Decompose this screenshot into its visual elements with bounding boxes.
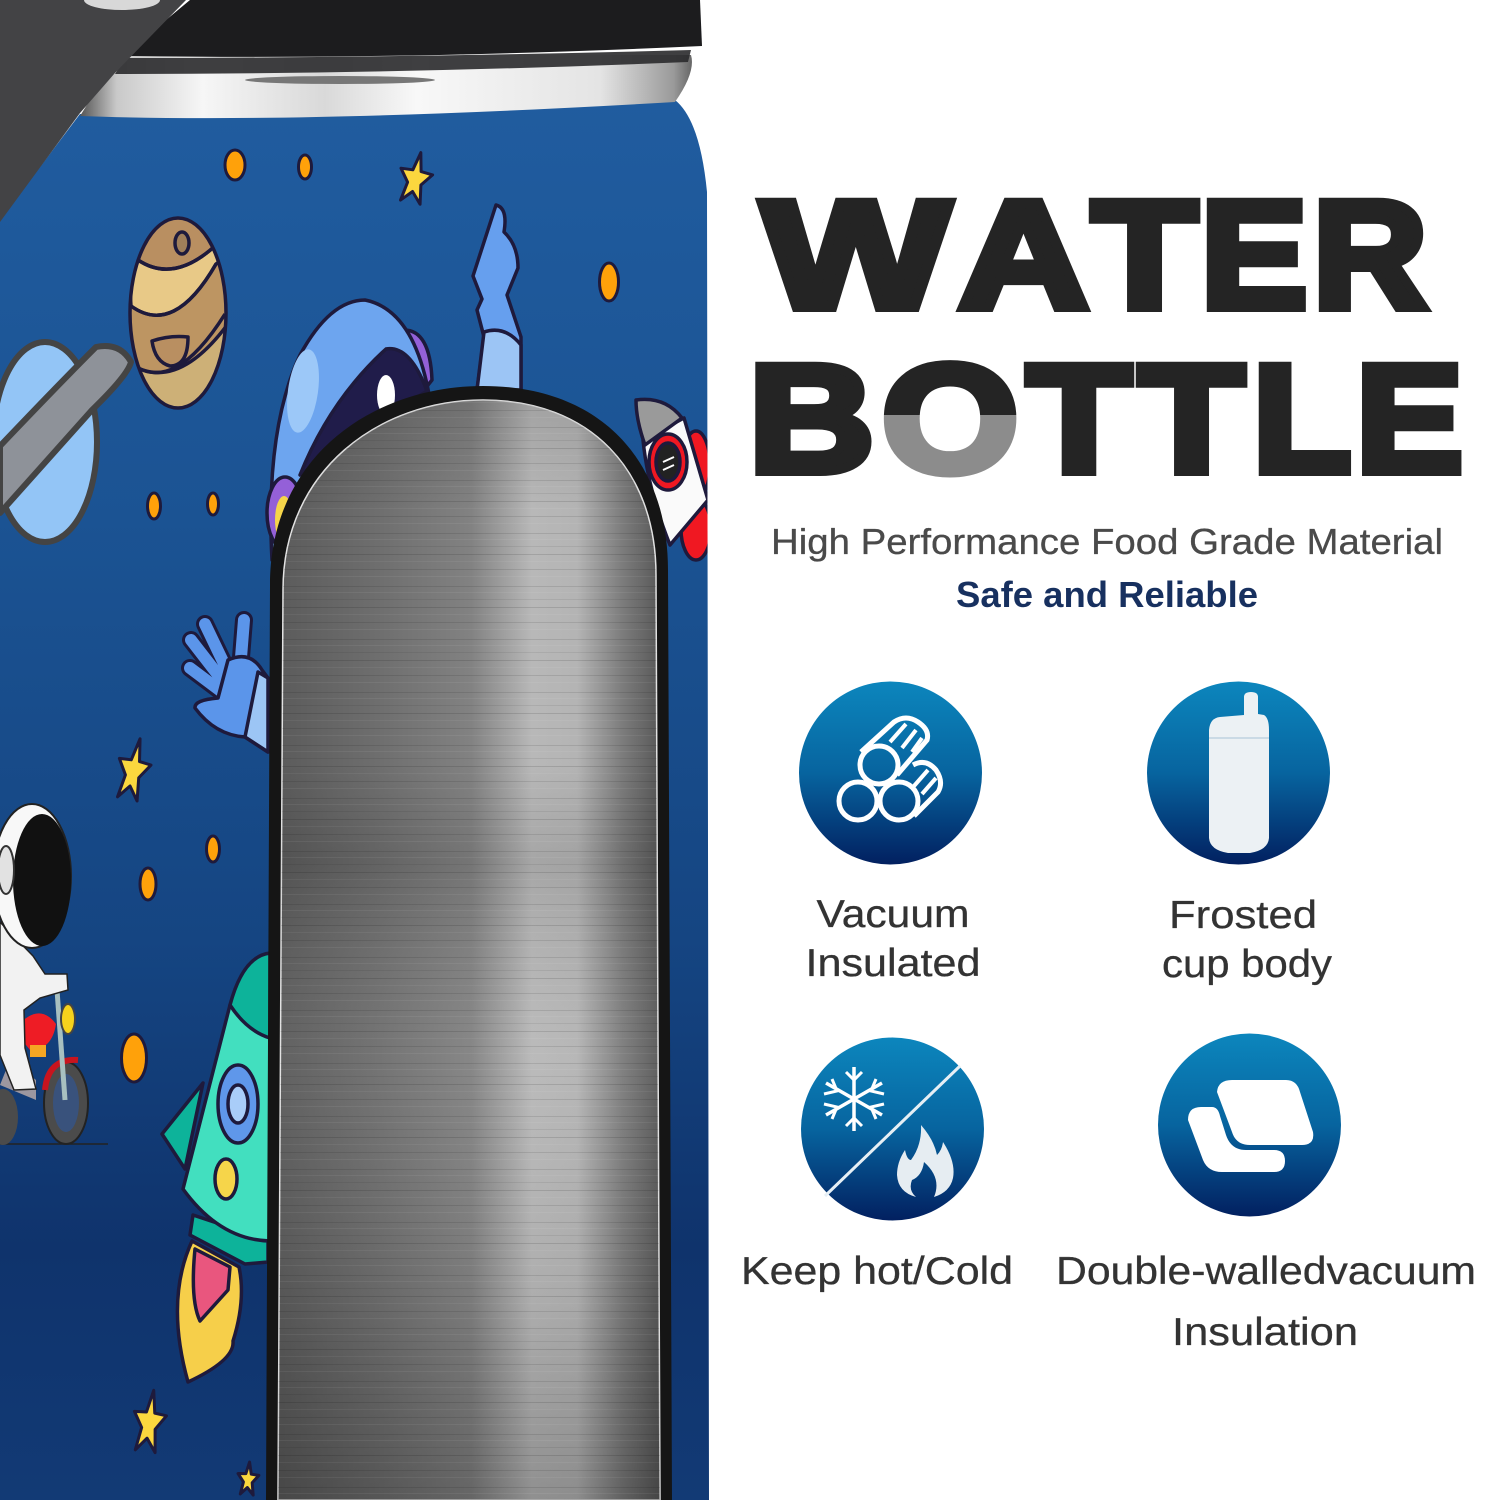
astronaut helmet <box>267 300 432 560</box>
title: WATER: A <box>958 170 1088 340</box>
striped planet <box>128 216 228 410</box>
astronaut raised hand <box>473 205 521 390</box>
small rocket <box>636 399 711 560</box>
astronaut waving hand <box>190 620 268 752</box>
title: BOTTLE: E <box>1356 334 1463 504</box>
title: BOTTLE: T <box>1139 334 1244 504</box>
feature: frosted cup body <box>1147 682 1333 986</box>
label: Frosted <box>1169 894 1317 937</box>
metal neck ring <box>80 50 692 118</box>
label line 2: Insulation <box>1172 1311 1358 1354</box>
title: WATER: R <box>1313 170 1427 340</box>
title: BOTTLE: B <box>749 334 874 504</box>
decoration: stars and dots <box>111 149 618 1495</box>
title: WATER: W <box>762 170 951 340</box>
feature: keep hot/cold <box>741 1038 1013 1293</box>
lid strap <box>0 0 186 222</box>
feature: vacuum insulated <box>799 682 982 985</box>
subtitle: High Performance Food Grade Material <box>771 521 1443 562</box>
subtitle emphasis: Safe and Reliable <box>956 574 1258 615</box>
brushed steel panel <box>278 400 660 1500</box>
title: BOTTLE: L <box>1253 334 1351 504</box>
icon: double wall panels <box>1158 1034 1341 1216</box>
strap button <box>84 0 160 10</box>
title: WATER: T <box>1092 170 1197 340</box>
label line 2: Insulated <box>806 942 980 985</box>
label line 2: cup body <box>1162 943 1333 986</box>
astronaut on motorcycle <box>0 804 108 1145</box>
label: Vacuum <box>816 893 970 936</box>
title: WATER: E <box>1201 170 1307 340</box>
label: Keep hot/Cold <box>741 1250 1013 1293</box>
teal rocket <box>162 953 270 1382</box>
black lid <box>130 0 702 57</box>
bottle blue body <box>0 100 709 1500</box>
steel band outline <box>266 386 672 1500</box>
icon: logs <box>799 682 982 864</box>
bottle photo <box>0 0 711 1500</box>
ringed planet <box>0 342 131 542</box>
title: BOTTLE: T <box>1027 334 1131 504</box>
icon: bottle <box>1147 682 1330 864</box>
label: Double-walledvacuum <box>1056 1250 1476 1293</box>
icon: snowflake and flame <box>801 1038 984 1220</box>
feature: double-walled vacuum insulation <box>1056 1034 1476 1354</box>
title: BOTTLE: O <box>882 334 1019 504</box>
